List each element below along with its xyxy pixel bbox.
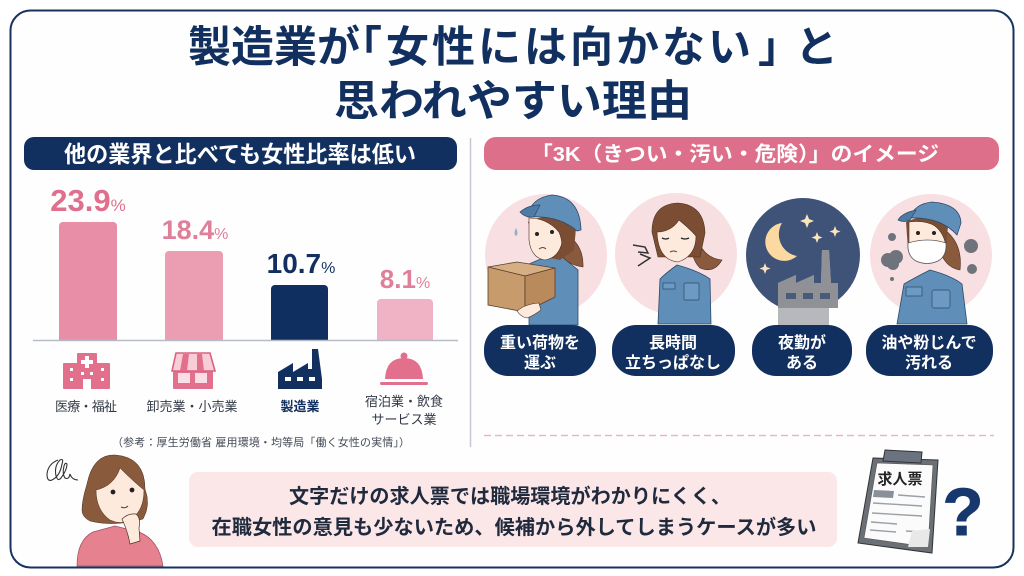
icon: question mark: ? — [943, 475, 983, 550]
heading: left — [24, 137, 457, 170]
bar chart: 8.1% — [380, 264, 430, 294]
heading: right — [484, 137, 999, 170]
icon: job sheet clipboard: 求人票 — [877, 470, 923, 488]
callout — [189, 472, 837, 547]
label: night shift: 夜勤が — [778, 333, 826, 352]
source note: （参考：厚生労働省 雇用環境・均等局「働く女性の実情」） — [112, 435, 410, 449]
icon: hospital — [63, 353, 110, 389]
label: heavy load: 重い荷物を — [500, 334, 580, 352]
label: long standing: 長時間 — [649, 334, 697, 352]
illustration: long standing — [615, 193, 737, 324]
callout: 文字だけの求人票では職場環境がわかりにくく、 — [289, 484, 731, 508]
callout: 在職女性の意見も少ないため、候補から外してしまうケースが多い — [212, 515, 816, 539]
title: 製造業が — [188, 24, 360, 72]
icon: factory — [278, 349, 322, 389]
label: long standing — [612, 325, 735, 376]
category labels — [55, 394, 443, 427]
illustration: carrying box — [485, 194, 607, 325]
title — [188, 24, 838, 126]
label: long standing: 立ちっぱなし — [625, 354, 721, 372]
bar chart: 23.9% — [50, 183, 126, 218]
title: 女性には向かない — [386, 24, 754, 72]
category labels: 卸売業・小売業 — [146, 399, 238, 414]
illustration: thinking woman — [47, 455, 163, 566]
label: oil and dust: 油や粉じんで — [881, 334, 977, 352]
title: 思われやすい理由 — [334, 78, 692, 126]
label: heavy load: 運ぶ — [524, 354, 556, 372]
illustration: night shift — [746, 198, 860, 325]
illustration: oil and dust — [870, 194, 992, 324]
icon: cloche — [380, 352, 428, 385]
label: oil and dust: 汚れる — [905, 354, 953, 372]
label: oil and dust — [866, 325, 993, 376]
label: heavy load — [484, 325, 596, 376]
bar chart: 10.7% — [267, 248, 335, 279]
category labels: 製造業 — [280, 399, 320, 414]
title: 「 — [339, 24, 382, 72]
icon: shop — [172, 353, 215, 389]
category labels: 医療・福祉 — [55, 399, 117, 414]
panel: 3K image — [484, 137, 999, 376]
icon: job sheet clipboard — [858, 450, 938, 553]
category labels: サービス業 — [371, 412, 437, 427]
title: 」 — [758, 24, 801, 72]
heading: left: 他の業界と比べても女性比率は低い — [64, 141, 416, 167]
bar chart — [33, 183, 458, 340]
bar chart: 18.4% — [162, 215, 228, 245]
title: と — [795, 24, 838, 72]
category labels: 宿泊業・飲食 — [365, 394, 443, 409]
label: night shift: ある — [786, 354, 818, 372]
heading: right: 「3K（きつい・汚い・危険）」のイメージ — [531, 142, 939, 166]
panel: female ratio chart — [24, 137, 458, 449]
label: night shift — [752, 325, 852, 376]
